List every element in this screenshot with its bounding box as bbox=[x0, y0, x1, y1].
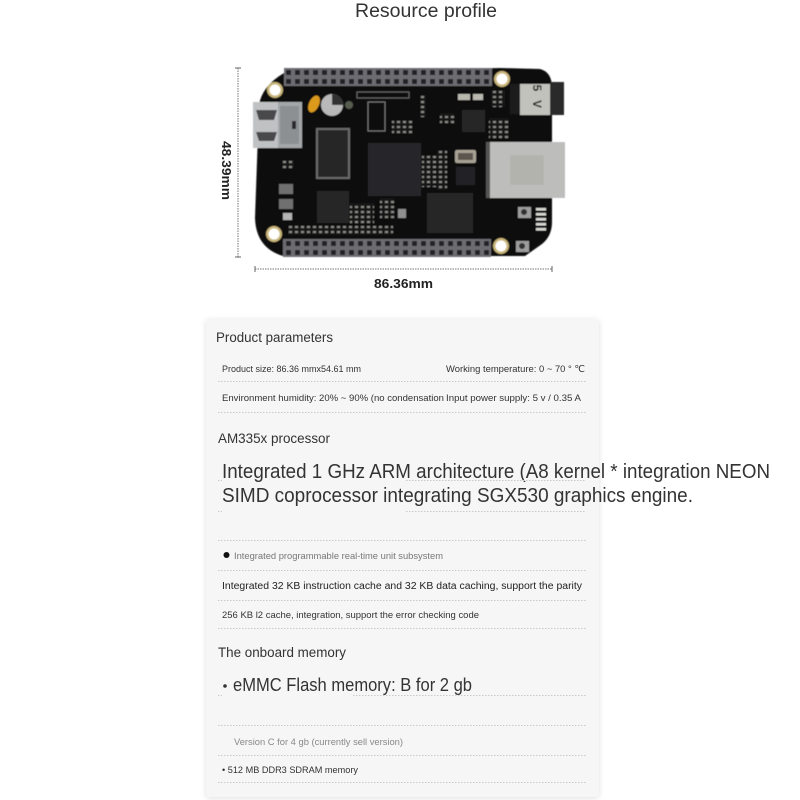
list item: instruction cache: Integrated 32 KB instruction cache and 32 KB data caching, support the parity bbox=[222, 581, 582, 592]
main processor chip bbox=[368, 143, 421, 196]
list item: version C: Version C for 4 gb (currently sell version) bbox=[234, 737, 403, 748]
5V barrel jack: V bbox=[530, 100, 544, 108]
parameter: product size: Product size: 86.36 mmx54.61 mm bbox=[222, 364, 361, 375]
panel: product parameters bbox=[206, 319, 770, 797]
board photo bbox=[253, 68, 565, 257]
mounting holes bbox=[266, 71, 510, 254]
processor description: SIMD coprocessor integrating SGX530 graphics engine. bbox=[222, 485, 693, 507]
memory chip U12 bbox=[316, 128, 350, 179]
list item: eMMC flash: eMMC Flash memory: B for 2 gb bbox=[233, 675, 472, 695]
surface-mount components bbox=[279, 90, 509, 235]
top pin header bbox=[284, 68, 492, 86]
bottom pin header bbox=[283, 239, 491, 257]
width dimension: 86.36mm bbox=[374, 276, 433, 291]
5V barrel jack bbox=[510, 82, 564, 115]
parameter: environment humidity: Environment humidity: 20% ~ 90% (no condensation bbox=[222, 393, 444, 404]
USB connector bbox=[253, 102, 302, 148]
small chips bbox=[368, 102, 485, 185]
list item: L2 cache: 256 KB l2 cache, integration, support the error checking code bbox=[222, 610, 479, 621]
ethernet jack bbox=[486, 142, 565, 198]
crystal bbox=[455, 150, 476, 163]
processor description bbox=[222, 461, 770, 507]
processor description: Integrated 1 GHz ARM architecture (A8 kernel * integration NEON bbox=[222, 461, 770, 483]
capacitors bbox=[306, 94, 353, 116]
list item: real-time unit: Integrated programmable real-time unit subsystem bbox=[234, 551, 443, 562]
heading: product parameters: Product parameters bbox=[216, 330, 333, 345]
list item: DDR3 memory: • 512 MB DDR3 SDRAM memory bbox=[222, 765, 358, 776]
push buttons and LEDs bbox=[516, 207, 546, 252]
parameter: working temperature: Working temperature: 0 ~ 70 ° ℃ bbox=[446, 364, 585, 375]
heading: onboard memory: The onboard memory bbox=[218, 645, 346, 660]
title: Resource profile bbox=[355, 1, 497, 22]
chip U11 bbox=[317, 191, 349, 223]
height dimension: 48.39mm bbox=[219, 141, 234, 200]
heading: AM335x processor: AM335x processor bbox=[218, 431, 330, 446]
parameter: input power supply: Input power supply: 5 v / 0.35 A bbox=[446, 393, 582, 404]
board outline bbox=[255, 68, 552, 256]
5V barrel jack: 5 bbox=[530, 85, 544, 92]
flash chip bbox=[427, 193, 473, 233]
